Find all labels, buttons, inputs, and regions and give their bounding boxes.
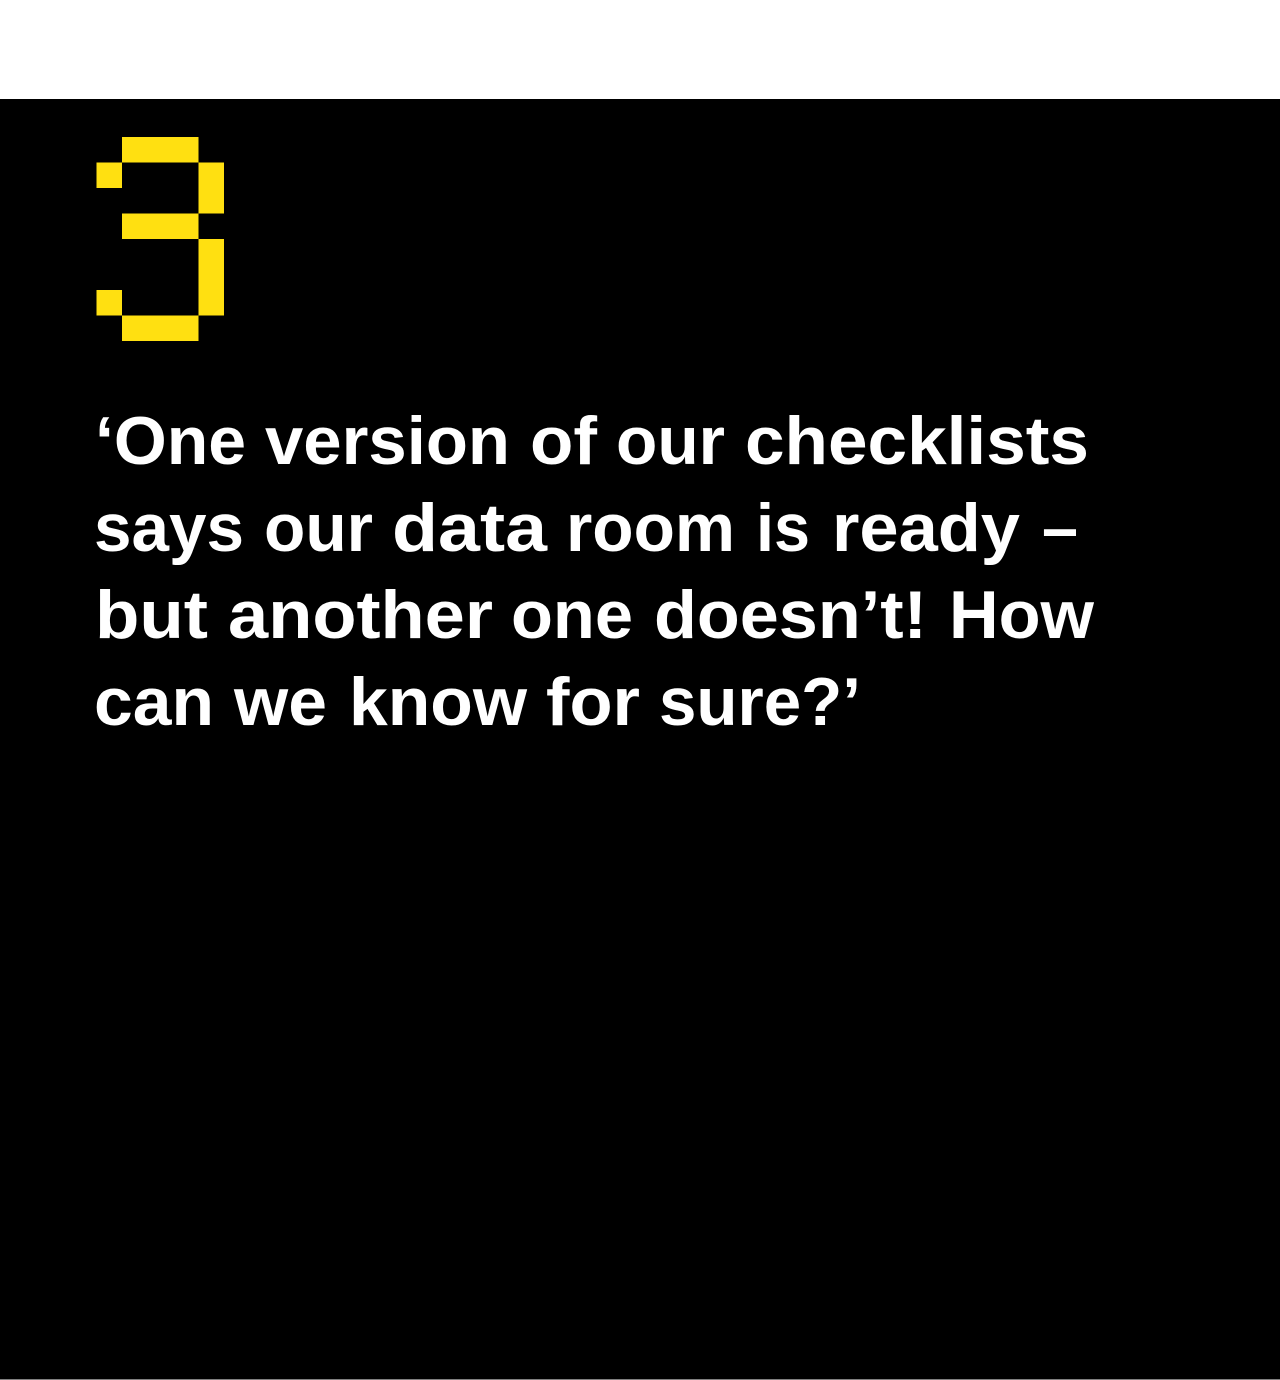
quote text: room <box>566 490 735 566</box>
quote text: of <box>530 403 597 479</box>
quote text: – <box>1042 490 1078 566</box>
quote text: ‘One <box>95 403 246 479</box>
quote text: but <box>95 577 208 653</box>
quote text: our <box>264 490 373 566</box>
quote text <box>94 403 1095 740</box>
quote text: checklists <box>745 403 1089 479</box>
quote text: our <box>616 403 725 479</box>
quote text: is <box>756 490 810 566</box>
icon: pixel numeral 3 <box>96 137 224 341</box>
quote text: doesn’t! <box>654 577 927 653</box>
quote text: sure?’ <box>659 664 861 740</box>
quote text: for <box>546 664 640 740</box>
quote text: one <box>511 577 633 653</box>
quote text: says <box>94 490 244 566</box>
quote text: version <box>265 403 510 479</box>
quote text: know <box>349 664 528 740</box>
quote text: another <box>228 577 493 653</box>
quote text: ready <box>832 490 1020 566</box>
quote text: we <box>233 664 327 740</box>
quote text: How <box>949 577 1095 653</box>
quote text: data <box>392 490 548 566</box>
quote text: can <box>94 664 214 740</box>
